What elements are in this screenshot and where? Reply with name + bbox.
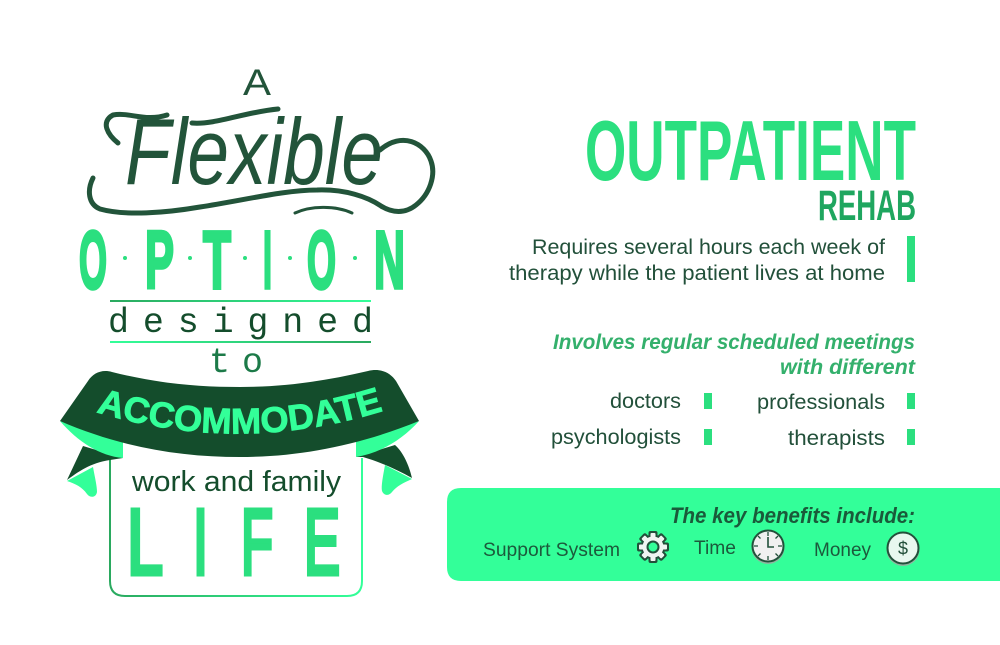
icon: dollar: $ — [898, 538, 908, 558]
panel heading: The key benefits include: — [670, 503, 915, 528]
ribbon fold: right — [356, 421, 419, 457]
panel: box around work and family life — [110, 458, 362, 596]
ribbon banner — [60, 370, 419, 457]
ribbon tail: left — [67, 446, 123, 497]
rule below designed — [110, 341, 371, 343]
text block: regular meetings: Involves regular scheduled meetings — [553, 331, 915, 354]
word: LIFE — [127, 490, 340, 594]
word: LIFE: I — [193, 490, 208, 594]
word: LIFE: E — [304, 490, 340, 594]
word: A: A — [243, 62, 271, 103]
text block: description: Requires several hours each week of — [532, 236, 885, 259]
subheading: REHAB: REHAB — [818, 182, 916, 230]
text block: regular meetings: with different — [780, 356, 916, 379]
label: money: Money — [814, 540, 871, 561]
icon: dollar — [886, 532, 920, 566]
text block: regular meetings — [553, 331, 916, 379]
word: OPTION: I — [263, 215, 272, 306]
label: time: Time — [694, 538, 736, 559]
label: support system: Support System — [483, 540, 620, 561]
list: therapists: therapists — [788, 427, 885, 450]
word: OPTION: O — [307, 215, 336, 306]
flourish: script swashes around Flexible — [89, 109, 433, 213]
list: professionals: professionals — [757, 391, 885, 414]
word: OPTION: O — [79, 215, 107, 306]
panel: left lettering composition — [60, 62, 436, 597]
text block: description — [509, 236, 885, 285]
word: LIFE: L — [127, 490, 163, 594]
panel: key benefits — [447, 488, 1000, 581]
ribbon tail: right — [356, 445, 412, 495]
word: to: to — [209, 343, 263, 383]
word: OPTION: T — [203, 215, 231, 306]
list: doctors — [610, 390, 712, 413]
word: LIFE: F — [241, 490, 273, 594]
dots between OPTION letters — [123, 256, 357, 260]
rule above designed — [110, 300, 371, 302]
list: doctors: doctors — [610, 390, 681, 413]
ribbon fold: left — [60, 421, 123, 458]
accent bar: description — [907, 236, 915, 282]
word: ACCOMMODATE: ACCOMMODATE — [96, 387, 383, 434]
word: OPTION: P — [145, 215, 174, 306]
word: OPTION: N — [374, 215, 405, 306]
text: work and family: work and family — [131, 466, 342, 498]
icon: gear — [637, 531, 669, 563]
panel background — [447, 488, 1000, 581]
icon: clock — [752, 530, 784, 564]
text block: description: therapy while the patient lives at home — [509, 262, 885, 285]
list: psychologists: psychologists — [551, 426, 681, 449]
word: designed: designed — [108, 303, 373, 343]
arc path for ACCOMMODATE — [96, 410, 386, 434]
word: Flexible: Flexible — [125, 99, 383, 204]
word: OPTION — [79, 215, 405, 306]
